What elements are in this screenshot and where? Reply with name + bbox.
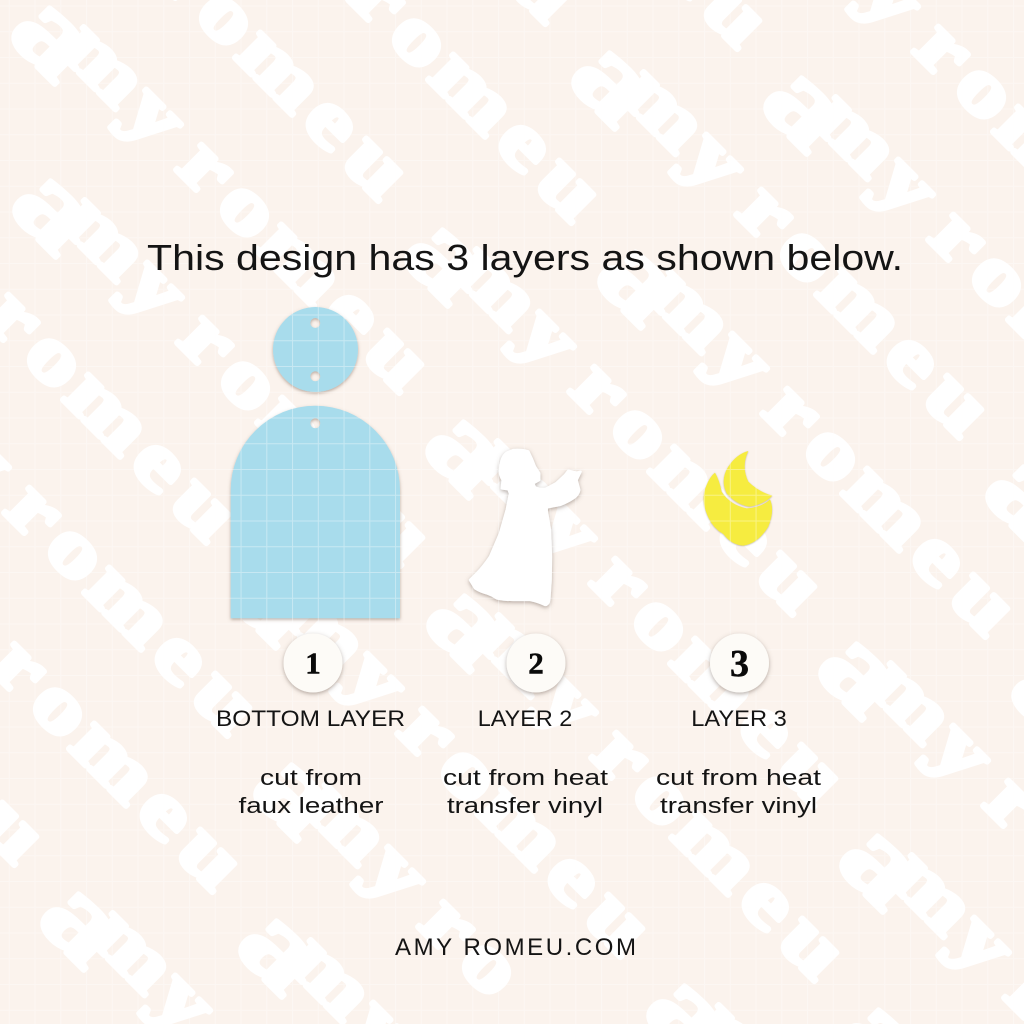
watermark word: my romeu (604, 46, 1011, 453)
column 2: layer 2 (443, 634, 609, 818)
watermark word: a (574, 209, 712, 347)
watermark word: my romeu (459, 589, 866, 996)
layer name: LAYER 2 (478, 706, 572, 731)
footer url: AMY ROMEU.COM (395, 934, 636, 961)
watermark word: my romeu (45, 174, 452, 581)
layer name: LAYER 3 (691, 706, 787, 731)
watermark word (795, 601, 1024, 1024)
watermark word: a (548, 10, 686, 148)
watermark word: my romeu (458, 415, 865, 822)
layer 1 shape: blue circle and arch with punched holes (231, 307, 400, 618)
watermark word: my ro (286, 758, 542, 1013)
watermark word (817, 967, 1024, 1024)
number badge 3: 3 (730, 643, 749, 685)
number badge 1 (284, 634, 342, 692)
layer 2 shape: white silhouette of a praying figure (470, 450, 581, 605)
material note line 2: transfer vinyl (660, 793, 817, 818)
flame upper lobe (724, 451, 772, 507)
watermark word: a (381, 187, 519, 325)
watermark word: my romeu (265, 565, 672, 972)
watermark word: a (740, 35, 878, 173)
watermark word (962, 424, 1024, 889)
watermark word: a (403, 553, 541, 691)
watermark word: my romeu (44, 1, 451, 408)
watermark word (740, 35, 1024, 500)
watermark word (816, 793, 1024, 1024)
material note line 1: cut from heat (443, 765, 609, 790)
number badge 3 (710, 634, 769, 692)
watermark word: a (209, 529, 347, 667)
material note line 1: cut from heat (656, 765, 822, 790)
column 1: bottom layer (216, 634, 405, 818)
watermark word: a (795, 601, 933, 739)
watermark word (230, 722, 544, 1024)
watermark word: a (215, 878, 353, 1016)
number badge 2: 2 (528, 646, 544, 680)
number badge 2 (506, 634, 566, 692)
material note line 1: cut from (260, 765, 362, 790)
blue arch with one hole (231, 406, 400, 618)
watermark word: a (816, 793, 954, 931)
layer 3 shape: yellow flame (704, 451, 772, 546)
flame lower lobe (704, 473, 772, 546)
layer name: BOTTOM LAYER (216, 706, 405, 731)
watermark word (17, 851, 238, 1024)
title: This design has 3 layers as shown below. (147, 237, 903, 278)
watermark word: a (17, 851, 155, 989)
watermark word: a (230, 722, 368, 860)
blue circle with two holes (273, 307, 358, 392)
material note line 2: faux leather (238, 793, 384, 818)
watermark word (215, 878, 436, 1024)
column 3: layer 3 (656, 634, 822, 818)
number badge 1: 1 (305, 646, 321, 680)
watermark word: my romeu (437, 223, 844, 630)
material note line 2: transfer vinyl (447, 793, 603, 818)
watermark word: a (402, 379, 540, 517)
